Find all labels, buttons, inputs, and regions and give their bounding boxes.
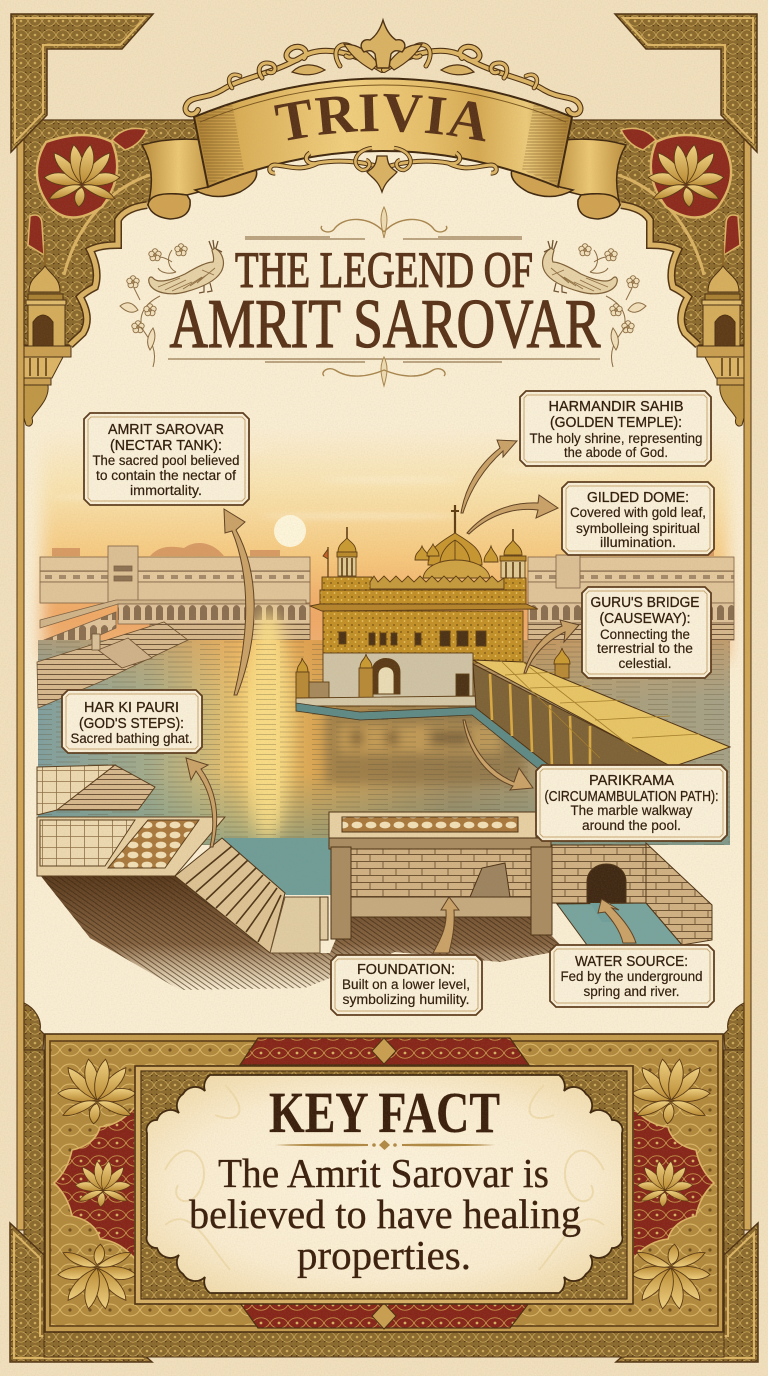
upper platform and ghat steps — [37, 765, 155, 815]
callout: Water Source — [550, 945, 714, 1007]
parapet — [322, 577, 372, 592]
clouds — [50, 443, 620, 519]
callout: Foundation — [331, 955, 482, 1015]
callout: Guru's Bridge: GURU'S BRIDGE — [590, 595, 700, 611]
bottom strip — [44, 1332, 724, 1357]
water surface — [38, 640, 730, 845]
floral sprig left — [120, 244, 187, 367]
front kiosk — [359, 654, 373, 702]
ribbon body — [194, 78, 572, 187]
key fact line two: believed to have healing — [189, 1191, 581, 1237]
foundation block — [320, 812, 552, 940]
callout: Guru's Bridge: celestial. — [618, 656, 672, 671]
callout: Water Source: Fed by the underground — [560, 969, 702, 984]
cracked landing slab — [270, 897, 320, 953]
outer frame — [45, 1034, 723, 1332]
door — [456, 674, 469, 697]
arrow: water source — [598, 899, 636, 943]
callout: Amrit Sarovar: (NECTAR TANK): — [110, 438, 222, 454]
flag — [323, 547, 328, 577]
soil hatching — [40, 875, 565, 990]
bottom red banner — [240, 1303, 529, 1328]
lower marble platform — [37, 817, 225, 876]
Har ki Pauri stairs — [175, 838, 285, 953]
lattice fence — [309, 682, 329, 700]
sky wash — [42, 435, 728, 660]
sun reflection on water — [244, 610, 292, 840]
lower curl — [24, 1003, 44, 1050]
arrow: Amrit Sarovar — [224, 509, 254, 695]
side border band — [17, 140, 24, 1230]
key fact line one: The Amrit Sarovar is — [218, 1150, 549, 1196]
divider — [275, 1140, 495, 1150]
water tint overlay — [38, 640, 730, 845]
callout: Water Source: WATER SOURCE: — [575, 954, 688, 970]
arrow: Harmandir Sahib — [461, 440, 517, 513]
left ribbon tail — [142, 139, 257, 219]
inner parchment field — [24, 120, 744, 1050]
callout: Guru's Bridge: Connecting the — [600, 627, 690, 642]
title line one: THE LEGEND OF — [235, 243, 533, 299]
title line two: AMRIT SAROVAR — [170, 286, 601, 363]
red field behind lotus — [37, 135, 117, 218]
callout: Har ki Pauri — [62, 690, 202, 753]
callout: Gilded Dome: GILDED DOME: — [587, 490, 689, 506]
callout: Har ki Pauri: (GOD'S STEPS): — [79, 716, 184, 732]
sun — [274, 515, 306, 547]
bottom diamond — [372, 1303, 396, 1329]
inner frame filigree — [141, 1071, 627, 1299]
left medallion lotus — [75, 1161, 131, 1207]
bottom fleur — [367, 156, 397, 192]
side strip — [24, 1050, 44, 1255]
left red medallion — [54, 1107, 135, 1259]
callout: Water Source: spring and river. — [584, 984, 680, 999]
main wall — [323, 611, 523, 663]
plinth — [296, 696, 476, 706]
left kiosk — [296, 658, 309, 700]
callout: Guru's Bridge: (CAUSEWAY): — [600, 611, 690, 627]
small red leaf top — [112, 128, 147, 150]
floral sprig right — [579, 244, 646, 367]
callout: Amrit Sarovar: immortality. — [130, 483, 202, 498]
marble base — [323, 653, 473, 699]
arrow: Guru's Bridge — [524, 620, 579, 673]
arch rim — [70, 205, 147, 345]
corner lotus bottom right — [632, 1244, 710, 1309]
upper frieze — [320, 590, 526, 605]
trivia banner — [141, 18, 627, 220]
top diamond — [372, 1038, 396, 1064]
callout: Parikrama: The marble walkway — [570, 803, 693, 818]
right medallion lotus — [637, 1161, 693, 1207]
right ribbon tail — [511, 139, 626, 219]
top flourish scrolls — [321, 219, 447, 232]
lotus flower — [44, 145, 120, 207]
callout: Foundation: Built on a lower level, — [342, 977, 470, 992]
teal foreground water — [222, 838, 332, 895]
callout: Gilded Dome: illumination. — [600, 535, 676, 550]
cresting row — [370, 576, 504, 589]
left ghat steps — [37, 622, 188, 708]
inner arch band — [64, 175, 150, 275]
callout: Parikrama — [536, 765, 727, 841]
upper rule — [245, 237, 522, 239]
panel: key fact — [44, 1034, 724, 1357]
eave — [310, 604, 538, 611]
callout: Parikrama: (CIRCUMAMBULATION PATH): — [544, 789, 718, 805]
callout: Guru's Bridge: terrestrial to the — [597, 641, 693, 656]
top flourish — [381, 207, 387, 238]
plaque watermark swirls — [165, 1085, 604, 1270]
right frame mirrored — [563, 14, 758, 1362]
callout: Foundation: symbolizing humility. — [342, 992, 470, 1007]
small red leaf side — [28, 215, 44, 255]
banner word: TRIVIA — [274, 94, 486, 142]
right red medallion — [633, 1107, 714, 1259]
pool wall under the temple — [296, 703, 560, 780]
ripples — [38, 640, 730, 845]
bottom corner — [10, 1223, 152, 1362]
key fact heading: KEY FACT — [269, 1080, 500, 1145]
main title ornaments — [168, 207, 600, 386]
top scrollwork — [185, 44, 581, 114]
arrow: Parikrama — [463, 720, 533, 790]
corner lotus top left — [58, 1059, 136, 1124]
callout: Harmandir Sahib — [520, 391, 711, 466]
top fleur — [361, 20, 405, 68]
distant skyline — [52, 543, 714, 556]
small pavilion on steps — [92, 634, 152, 668]
peacock left — [149, 240, 223, 294]
left frame with arch and column — [10, 14, 205, 1362]
callout: Har ki Pauri: Sacred bathing ghat. — [70, 731, 192, 746]
callout: Amrit Sarovar — [84, 413, 249, 505]
ribbon end hatching right — [522, 103, 569, 184]
right tower — [500, 529, 526, 578]
callout: Har ki Pauri: HAR KI PAURI — [84, 700, 179, 716]
windows — [339, 631, 486, 646]
arrow: Har ki Pauri — [186, 758, 217, 847]
lower scrollwork — [270, 148, 496, 173]
callout: Gilded Dome: symbolleing spiritual — [576, 521, 700, 536]
corner lotus bottom left — [58, 1244, 136, 1309]
finial dome column — [24, 245, 71, 426]
callout: Gilded Dome: Covered with gold leaf, — [570, 505, 706, 520]
doorway arch — [372, 658, 400, 694]
callout: Harmandir Sahib: the abode of God. — [564, 445, 668, 460]
lower rule — [168, 359, 600, 362]
Guru's Bridge causeway — [473, 660, 730, 782]
ribbon end hatching left — [197, 103, 244, 184]
left palace ranges — [40, 546, 310, 660]
callout: Amrit Sarovar: to contain the nectar of — [96, 468, 236, 483]
arrow: gilded dome — [467, 495, 558, 534]
cream plaque — [147, 1075, 622, 1293]
callout: Amrit Sarovar: The sacred pool believed — [92, 453, 240, 468]
baseline curve for banner word — [276, 131, 490, 143]
callout: Amrit Sarovar: AMRIT SAROVAR — [108, 422, 224, 438]
outer frame inner line — [50, 1041, 718, 1326]
callout: Guru's Bridge — [582, 587, 711, 678]
Golden Temple building — [296, 505, 538, 706]
left tower — [337, 527, 357, 576]
callout: Gilded Dome — [562, 482, 714, 555]
arrow: foundation — [433, 897, 459, 953]
corner lotus top right — [632, 1059, 710, 1124]
temple reflection — [325, 706, 525, 784]
top corner — [11, 14, 153, 152]
illustration: Golden Temple at sunrise — [37, 435, 734, 990]
water source tunnel — [552, 843, 712, 945]
lower flourish scrolls — [323, 369, 445, 376]
callout: Foundation: FOUNDATION: — [357, 962, 455, 978]
top red banner — [240, 1038, 529, 1065]
ribbon inner line — [200, 85, 566, 122]
callout: Harmandir Sahib: The holy shrine, representing — [530, 431, 702, 446]
callout: Harmandir Sahib: (GOLDEN TEMPLE): — [550, 415, 682, 431]
lower flourish — [381, 357, 387, 386]
callout: Parikrama: around the pool. — [582, 818, 681, 833]
callout: Parikrama: PARIKRAMA — [589, 773, 674, 789]
key fact line three: properties. — [297, 1232, 471, 1278]
right palace ranges — [528, 555, 734, 640]
peacock right — [543, 240, 617, 294]
inner frame — [135, 1066, 633, 1304]
central dome — [423, 505, 490, 578]
callout: Harmandir Sahib: HARMANDIR SAHIB — [548, 399, 684, 415]
small domes — [415, 544, 498, 562]
right kiosk by causeway — [554, 648, 570, 678]
arch spandrel — [24, 120, 205, 345]
